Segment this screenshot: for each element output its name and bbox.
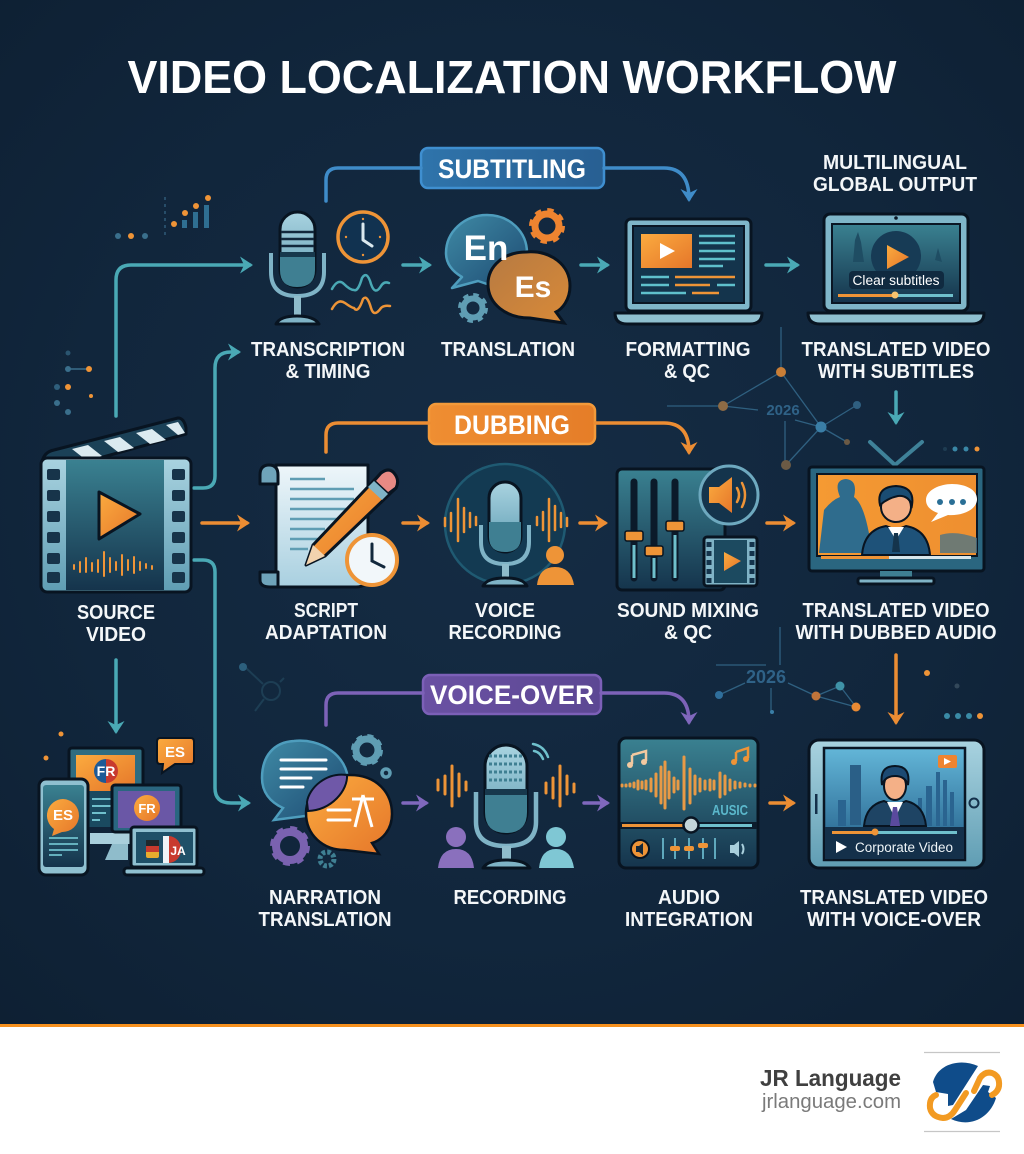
logo: JR Language [924,1052,1000,1132]
label: source video: VIDEO [86,624,146,646]
label: translated video with voice-over [800,887,988,931]
label: translated video with dubbed audio: WITH DUBBED AUDIO [796,622,996,644]
label: translated video with subtitles: WITH SUBTITLES [818,361,974,383]
decorative network with 2026 (lower) [715,627,860,714]
connector: dubbing bracket [326,423,689,452]
label: voice recording: RECORDING [448,622,562,644]
footer brand text [760,1065,901,1113]
label: script adaptation [265,600,387,644]
footer panel [0,1024,1024,1154]
icon: tablet with corporate video [809,740,984,868]
icon: script with pencil and clock [260,465,398,587]
icon: audio integration panel [619,738,758,868]
label: transcription and timing [251,339,405,383]
label: multilingual global output: GLOBAL OUTPUT [813,174,977,196]
arrows: subtitling steps [403,265,896,422]
label: audio integration: INTEGRATION [625,909,753,931]
icon: formatting laptop [615,219,762,324]
label: translation: TRANSLATION [441,339,575,361]
label: sound mixing and qc [617,600,759,644]
label: multilingual global output: MULTILINGUAL [823,152,967,174]
badge: subtitling [421,148,604,188]
decorative dots right [924,446,983,719]
decorative network with 2026 (lower): 2026 [746,667,786,687]
badge: dubbing: DUBBING [454,410,570,440]
icon: sound mixer with speaker and film [617,466,758,590]
label: audio integration [625,887,753,931]
label: formatting and qc [626,339,750,383]
label: script adaptation: SCRIPT [294,600,358,622]
icon: multilingual device outputs: FR [97,763,115,779]
label: translated video with subtitles [802,339,990,383]
icon: tablet with corporate video: Corporate Video [855,840,953,855]
label: audio integration: AUDIO [658,887,720,909]
arrows: voice-over steps [403,801,793,805]
label: source video [77,602,155,646]
icon: translation bubbles and gears: Es [515,271,551,304]
label: translated video with dubbed audio: TRANSLATED VIDEO [802,600,990,622]
footer brand text: jrlanguage.com [761,1091,901,1113]
label: narration translation: TRANSLATION [258,909,392,931]
label: translated video with subtitles: TRANSLATED VIDEO [802,339,990,361]
label: voice recording: VOICE [475,600,535,622]
connector: subtitling bracket [326,168,689,201]
label: recording: RECORDING [454,887,566,909]
label: formatting and qc: & QC [664,361,710,383]
label: narration translation [258,887,392,931]
title: VIDEO LOCALIZATION WORKFLOW [128,51,897,103]
icon: voice-over recording microphone with speakers [438,744,574,868]
label: transcription and timing: TRANSCRIPTION [251,339,405,361]
arrows: source video to workflows [116,265,250,803]
label: source video: SOURCE [77,602,155,624]
footer brand text: JR Language [760,1065,901,1091]
icon: multilingual device outputs: ES [53,807,73,824]
label: translated video with voice-over: TRANSLATED VIDEO [800,887,988,909]
icon: output laptop with clear subtitles [808,214,984,324]
decorative data dots and bars [54,195,211,415]
label: translated video with voice-over: WITH VOICE-OVER [807,909,982,931]
icon: multilingual device outputs: ES [165,744,185,761]
label: multilingual global output [813,152,977,196]
label: formatting and qc: FORMATTING [626,339,750,361]
label: transcription and timing: & TIMING [286,361,370,383]
icon: narration translation bubbles and gears [262,737,392,866]
icon: voice recording microphone [445,464,574,586]
icon: multilingual device outputs: JA [170,844,186,858]
badge: subtitling: SUBTITLING [438,154,586,184]
label: sound mixing and qc: SOUND MIXING [617,600,759,622]
icon: output laptop with clear subtitles: Clear subtitles [852,273,940,288]
badge: voice-over: VOICE-OVER [430,680,594,710]
icon: translation bubbles and gears [446,211,570,323]
icon: transcription microphone with clock and waves [271,212,390,324]
decorative faint magnifier [239,663,284,711]
icon: multilingual device outputs: FR [138,801,156,816]
decorative network with 2026 (upper) [667,327,861,470]
label: script adaptation: ADAPTATION [265,622,387,644]
label: narration translation: NARRATION [269,887,381,909]
decorative network with 2026 (upper): 2026 [766,402,800,419]
arrows: dubbing steps [403,523,896,722]
icon: source video clapper and film [41,418,191,592]
arrow: source to script adaptation [202,521,247,525]
connector: voice-over bracket [326,693,689,725]
label: voice recording [448,600,562,644]
icon: tv with dubbed presenter [809,442,984,584]
label: sound mixing and qc: & QC [664,622,712,644]
label: translated video with dubbed audio [796,600,996,644]
icon: multilingual device outputs [39,732,204,875]
icon: translation bubbles and gears: En [464,229,508,268]
icon: audio integration panel: AUSIC [712,802,748,819]
badge: dubbing [429,404,595,444]
